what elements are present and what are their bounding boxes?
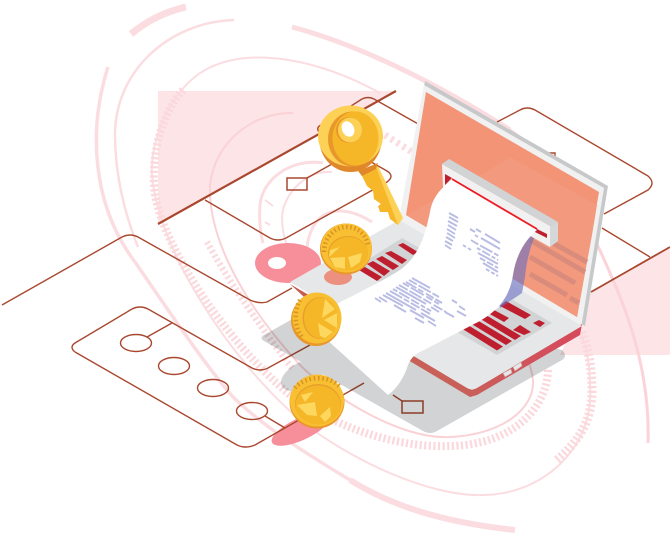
key [318, 106, 403, 225]
laptop screen frame [399, 81, 608, 328]
receipt paper [305, 180, 537, 395]
laptop [290, 81, 608, 397]
coin middle [291, 292, 342, 346]
keyboard pads [355, 238, 552, 355]
laptop base top [290, 220, 582, 390]
pink tag shape [255, 243, 321, 283]
slot red line [452, 179, 537, 229]
circuit outlines [2, 98, 652, 447]
laptop base side [290, 284, 582, 397]
coin bottom [290, 374, 344, 428]
coin top [320, 224, 372, 274]
background: pink blocks [158, 91, 670, 355]
laptop ground shadow [262, 298, 565, 433]
key shaft [358, 163, 403, 225]
thick diagonal lines [158, 91, 670, 292]
receipt text [375, 213, 500, 326]
keyboard keys [359, 243, 545, 350]
key head [318, 106, 383, 172]
receipt slot [442, 159, 558, 247]
paper shadow [498, 232, 537, 308]
coin shadow on base [324, 269, 352, 285]
screen display [406, 92, 599, 317]
pink coin shadow [267, 406, 335, 452]
ports [503, 362, 522, 377]
